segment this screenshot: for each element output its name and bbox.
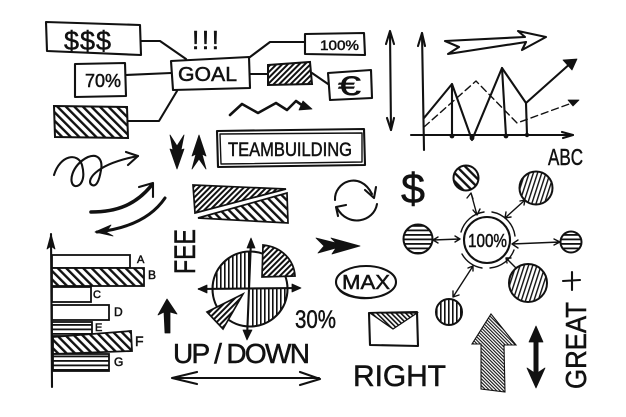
connector lines: [126, 41, 328, 121]
axes: [411, 33, 573, 150]
box: 100%: [305, 33, 365, 55]
bar labels: A: [137, 254, 145, 266]
icon: vertical double arrow: [386, 31, 394, 130]
icon: horizontal double arrow: [172, 372, 320, 385]
exploded wedge top right: [262, 245, 295, 277]
box: euro: €: [338, 71, 361, 101]
bar chart: [47, 234, 156, 387]
box: 70%: [75, 63, 126, 97]
box: goal: [171, 57, 250, 90]
box: euro: [328, 70, 372, 101]
icon: double down arrow: [170, 135, 184, 169]
dashed series: [424, 81, 579, 127]
hatched box right: [268, 62, 312, 85]
label: MAX: MAX: [342, 272, 390, 294]
node circles: [404, 166, 582, 325]
icon: curved arrow left: [95, 198, 165, 236]
icon: hollow long arrow: [445, 31, 546, 54]
line chart: [386, 31, 583, 170]
hatched triangles: [193, 185, 288, 223]
word: UP/DOWN: UP / DOWN: [173, 338, 310, 369]
icon: bold up arrow: [158, 299, 177, 333]
hatched quarters: [213, 252, 287, 326]
axes: [198, 238, 301, 340]
spoke arrows: [433, 193, 560, 297]
label: ABC: ABC: [548, 144, 583, 170]
exclamation marks: !!!: [192, 25, 219, 55]
label: MAX: [336, 266, 396, 298]
hub: 100%: [461, 212, 515, 268]
bar labels: [93, 254, 156, 369]
axis: [47, 234, 55, 387]
teambuilding label: TEAMBUILDING: [228, 140, 352, 161]
icon: cycle arrows: [335, 181, 377, 220]
word: GREAT +: GREAT: [561, 302, 593, 389]
word: RIGHT: RIGHT: [353, 360, 446, 393]
box: dollars: $$$: [64, 26, 111, 56]
icon: bold vertical double arrow: [527, 326, 545, 388]
bar labels: B: [148, 268, 156, 282]
pie chart: [198, 238, 336, 340]
solid series: [424, 59, 577, 140]
teambuilding label: [217, 129, 365, 167]
bar labels: G: [114, 355, 123, 369]
icon: spiral arrow: [54, 152, 138, 186]
icon: double up arrow: [192, 135, 206, 169]
icon: envelope: [369, 312, 418, 346]
bar labels: D: [114, 305, 123, 319]
exploded wedge left: [207, 294, 243, 329]
box: 100%: 100%: [320, 37, 359, 53]
bar labels: C: [93, 289, 101, 301]
pie outline: [212, 252, 288, 326]
hub diagram: [404, 166, 582, 325]
bar labels: E: [95, 322, 102, 334]
bars: [52, 255, 144, 371]
box: 70%: 70%: [85, 71, 121, 91]
box: goal: GOAL: [178, 64, 237, 86]
icon: bold right arrow: [316, 238, 360, 254]
icon: curved arrow right: [91, 183, 153, 212]
word: FEE: FEE: [169, 229, 202, 274]
dollar sign: $: [401, 165, 425, 213]
icon: big hatched up arrow: [472, 314, 516, 392]
goal mind map: [46, 22, 372, 138]
icon: zigzag arrow: [230, 101, 312, 115]
hatched box left: [54, 106, 128, 138]
bar labels: F: [135, 333, 144, 349]
label: 30%: 30%: [295, 306, 336, 334]
box: dollars: [46, 22, 141, 56]
hub: 100%: 100%: [468, 231, 507, 251]
